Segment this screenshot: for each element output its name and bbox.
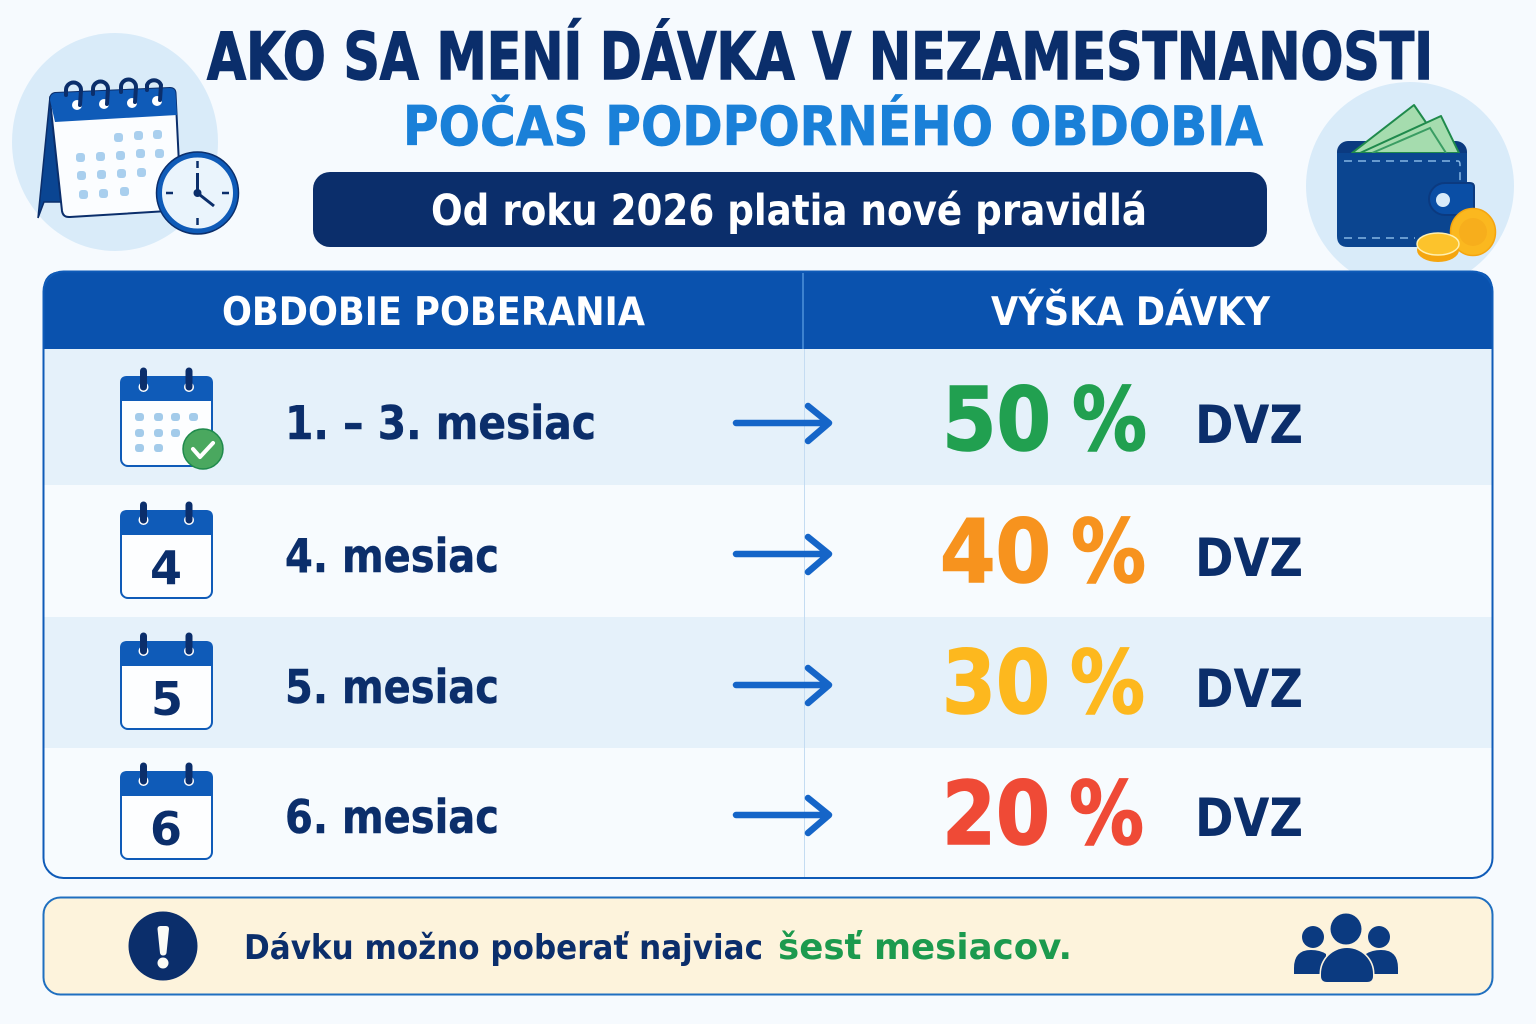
icon: calendar with clock [12,33,238,251]
icon: calendar 4 [120,505,213,598]
row 1: DVZ [1195,395,1303,456]
icon: group of people [1294,914,1398,982]
value: 20 %: % [1069,763,1144,865]
value: 20 %: 20 [942,763,1050,865]
row 4: DVZ [1195,788,1303,849]
icon: calendar 6: 6 [150,802,182,856]
arrow [736,406,829,441]
arrow [736,537,829,572]
value: 50 %: 50 [942,369,1051,471]
arrow [736,798,829,833]
row 2 [120,501,1303,603]
value: 40 %: 40 [940,501,1051,603]
row 3 [120,632,1303,734]
row 1 [120,369,1303,471]
value: 30 % [942,632,1145,734]
row 4 [120,763,1303,865]
value: 40 % [940,501,1146,603]
row 1: 1. – 3. mesiac [285,396,596,450]
row backgrounds [44,349,1492,748]
value: 50 %: % [1072,369,1147,471]
value: 30 %: 30 [942,632,1050,734]
panel: note [44,898,1492,994]
banner: new rules: Od roku 2026 platia nové pravidlá [431,186,1147,236]
arrow [736,668,829,703]
icon: exclamation mark [128,912,198,980]
icon: wallet with money [1306,82,1514,290]
value: 20 % [942,763,1144,865]
icon: calendar 6 [120,766,213,859]
table header: VÝŠKA DÁVKY [991,288,1271,335]
panel: table [43,271,1493,878]
row 2: 4. mesiac [285,529,499,583]
highlighted note text: šesť mesiacov. [778,927,1072,968]
row 3: DVZ [1195,659,1303,720]
row 2: DVZ [1195,528,1303,589]
icon: calendar with check [120,371,223,469]
value: 40 %: % [1071,501,1146,603]
icon: calendar 4: 4 [150,541,182,595]
subtitle: POČAS PODPORNÉHO OBDOBIA [403,95,1263,158]
icon: calendar 5 [120,636,213,729]
table header: OBDOBIE POBERANIA [222,290,645,335]
icon: calendar 5: 5 [151,672,183,726]
table header [43,271,1493,349]
note text: Dávku možno poberať najviac [244,928,763,968]
value: 50 % [942,369,1147,471]
value: 30 %: % [1070,632,1145,734]
banner: new rules [313,172,1267,247]
row 3: 5. mesiac [285,660,499,714]
row 4: 6. mesiac [285,790,499,844]
